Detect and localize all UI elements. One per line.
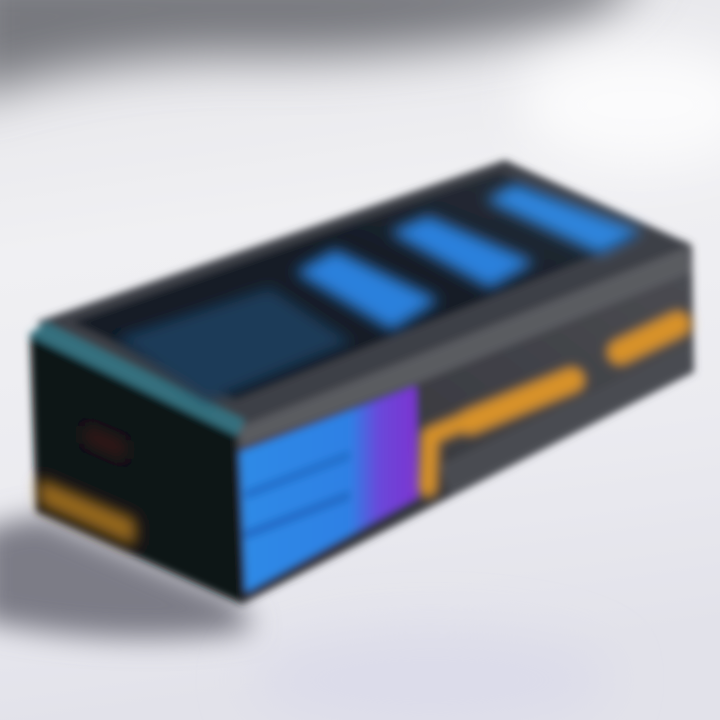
dim red mark on left face <box>85 425 125 460</box>
bright highlight top right <box>520 45 720 165</box>
device front face <box>235 240 694 604</box>
lighter strip along the top of the front face <box>240 240 692 448</box>
orange lettering on front face <box>428 324 678 488</box>
orange-free grey middle strip <box>440 345 694 495</box>
device <box>28 160 694 604</box>
device side face: left <box>30 335 242 604</box>
blue button 1 <box>296 250 438 330</box>
orange label on left face <box>38 478 135 546</box>
dark screen on top face <box>115 288 352 402</box>
blue button 3 <box>486 184 642 254</box>
teal edge on the top face <box>28 322 245 436</box>
blue and purple panel on front face <box>240 386 418 592</box>
soft lavender floor reflection <box>250 630 610 720</box>
device top face <box>28 160 692 436</box>
cast shadow <box>0 515 255 638</box>
dark blurred object at top <box>0 0 650 100</box>
blue button 2 <box>390 216 534 288</box>
